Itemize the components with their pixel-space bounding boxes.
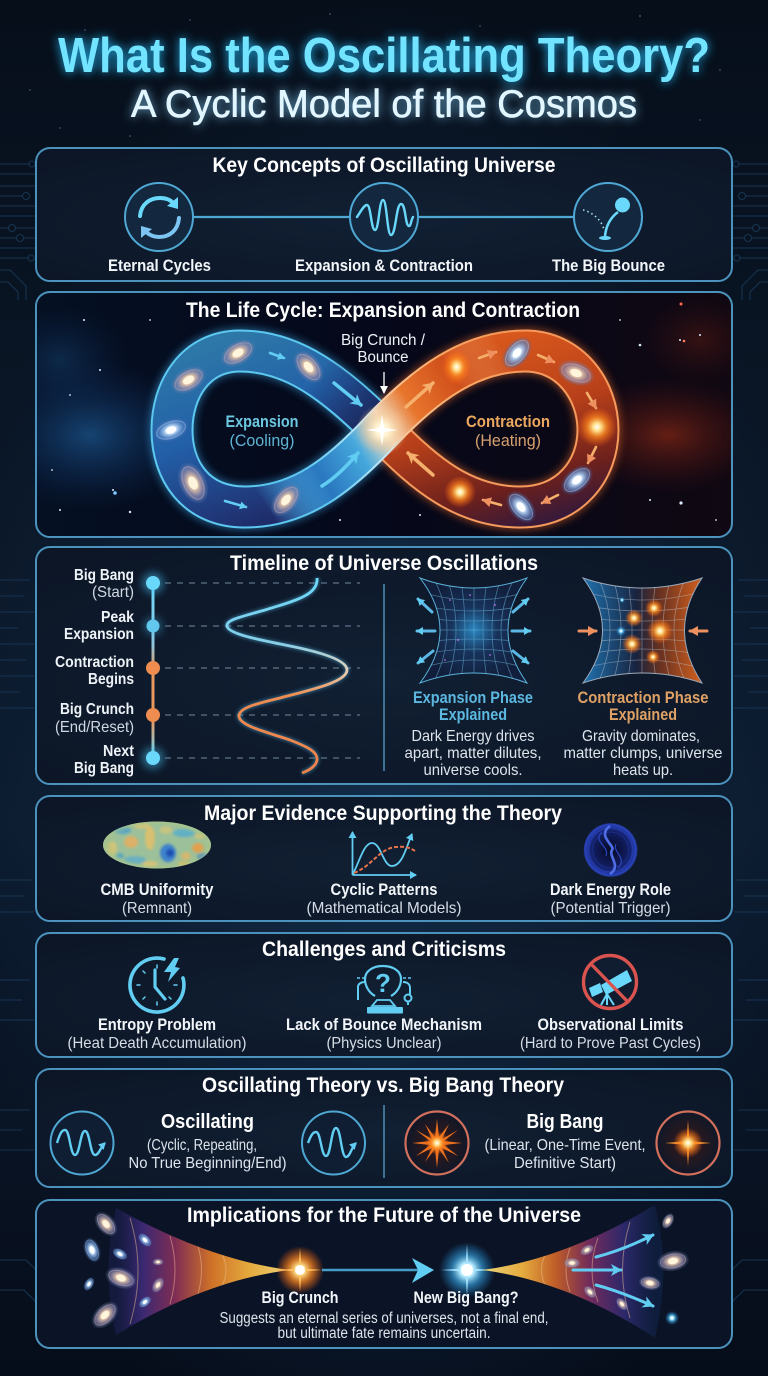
timeline labels: Next: [103, 743, 135, 760]
graphic: contraction space grid: [578, 575, 707, 685]
arrow: bounce pointer: [383, 372, 385, 393]
label: expansion cooling: [226, 412, 298, 450]
timeline labels: Big Crunch: [60, 701, 134, 718]
graphic: expansion space grid: [415, 575, 532, 685]
heading: implications: Implications for the Future of the Universe: [187, 1203, 581, 1227]
label: CMB uniformity: (Remnant): [122, 900, 192, 917]
icon: eternal cycles: [125, 183, 193, 251]
text: expansion phase explained: [404, 689, 542, 779]
label: dark energy role: (Potential Trigger): [550, 900, 670, 917]
text: big bang: Definitive Start): [514, 1155, 616, 1172]
panel: implications: [36, 1200, 732, 1348]
text: contraction phase explained: Contraction Phase: [578, 689, 708, 707]
left loop band: [172, 351, 382, 507]
label: contraction heating: [466, 412, 550, 450]
heading: timeline: Timeline of Universe Oscillations: [230, 551, 538, 575]
icon: expansion and contraction wave: [350, 183, 418, 251]
label: lack of bounce mechanism: Lack of Bounce Mechanism: [286, 1016, 482, 1034]
left funnel: [80, 1207, 290, 1335]
label: entropy problem: (Heat Death Accumulation): [68, 1035, 246, 1052]
icon: CMB map: [103, 822, 211, 868]
icon: cyclic patterns chart: [352, 832, 416, 875]
text: expansion phase explained: Dark Energy drives: [412, 728, 534, 745]
heading: evidence: Major Evidence Supporting the Theory: [204, 801, 562, 825]
text: contraction phase explained: Explained: [609, 706, 677, 724]
subtitle: A Cyclic Model of the Cosmos: [131, 83, 637, 126]
text: oscillating: Oscillating: [161, 1111, 254, 1133]
icon: oscillating wave 1: [50, 1112, 114, 1174]
oscillation wave: [227, 578, 347, 773]
text: contraction phase explained: matter clumps, universe: [564, 745, 723, 762]
label: CMB uniformity: CMB Uniformity: [100, 881, 214, 899]
right loop band: [382, 351, 598, 507]
label: lack of bounce mechanism: [286, 1016, 482, 1052]
text: contraction phase explained: heats up.: [613, 762, 673, 779]
label: entropy problem: Entropy Problem: [98, 1016, 216, 1034]
arrows: contraction flow: [406, 352, 596, 505]
text: expansion phase explained: Explained: [439, 706, 507, 724]
subtitle: A Cyclic Model of the Cosmos: [131, 83, 637, 126]
arrows: expansion outward: [417, 599, 530, 663]
icon: bounce mechanism: ?: [375, 968, 391, 998]
label: dark energy role: [550, 881, 671, 917]
timeline labels: Begins: [88, 671, 134, 688]
galaxies: contraction side: [442, 331, 617, 529]
infinity loop: [149, 331, 617, 529]
timeline labels: Contraction: [55, 654, 134, 671]
text: contraction phase explained: Gravity dominates,: [582, 728, 700, 745]
panel: comparison: [36, 1069, 732, 1187]
text: contraction phase explained: [564, 689, 723, 779]
text: implications summary: [220, 1310, 548, 1342]
label: contraction heating: Contraction: [466, 412, 550, 431]
heading: life cycle: The Life Cycle: Expansion and Contraction: [186, 298, 580, 322]
arrows: outward expansion: [573, 1235, 653, 1306]
label: cyclic patterns: (Mathematical Models): [306, 900, 462, 917]
text: big bang: Big Bang: [526, 1111, 604, 1133]
text: big bang: [484, 1111, 646, 1172]
panel: timeline: [36, 547, 732, 784]
arrows: expansion flow: [225, 353, 361, 507]
galaxies: expansion side: [149, 333, 330, 522]
label: cyclic patterns: Cyclic Patterns: [330, 881, 438, 899]
icon: big bang burst 2: [656, 1112, 720, 1174]
timeline labels: Peak: [101, 609, 134, 626]
bounce star: [356, 404, 408, 456]
timeline labels: [55, 567, 135, 777]
icon: big bounce: [574, 183, 642, 251]
label: expansion cooling: (Cooling): [230, 431, 294, 450]
text: oscillating: [128, 1111, 286, 1172]
heading: key concepts: Key Concepts of Oscillating Universe: [212, 153, 556, 177]
text: implications summary: Suggests an eternal series of universes, not a final end,: [220, 1310, 548, 1327]
timeline labels: Big Bang: [74, 760, 134, 777]
label: expansion and contraction: Expansion & Contraction: [295, 257, 473, 275]
timeline labels: (End/Reset): [55, 719, 134, 736]
label: lack of bounce mechanism: (Physics Unclear): [326, 1035, 442, 1052]
text: oscillating: No True Beginning/End): [128, 1155, 286, 1172]
label: cyclic patterns: [306, 881, 462, 917]
label: observational limits: [520, 1016, 701, 1052]
label: dark energy role: Dark Energy Role: [550, 881, 671, 899]
label: contraction heating: (Heating): [475, 431, 541, 450]
icon: dark energy swirl: [584, 823, 638, 877]
right funnel: [482, 1205, 691, 1338]
divider: [383, 1105, 385, 1178]
icon: bounce mechanism: [357, 966, 412, 1014]
connector line: [193, 216, 574, 218]
panel: challenges: [36, 933, 732, 1057]
timeline labels: Expansion: [64, 626, 134, 643]
heading: challenges: Challenges and Criticisms: [262, 937, 506, 961]
text: expansion phase explained: Expansion Phase: [413, 689, 533, 707]
text: expansion phase explained: apart, matter dilutes,: [404, 745, 542, 762]
label: expansion cooling: Expansion: [226, 412, 298, 431]
label: big bounce: The Big Bounce: [552, 257, 665, 275]
label: eternal cycles: Eternal Cycles: [108, 257, 211, 275]
timeline dashed guides: [165, 583, 360, 758]
text: expansion phase explained: universe cools.: [424, 762, 522, 779]
icon: oscillating wave 2: [302, 1112, 365, 1174]
timeline nodes: [142, 572, 164, 769]
panel: evidence: [36, 796, 732, 921]
label: big crunch bounce: Big Crunch /: [341, 332, 426, 349]
label: big crunch bounce: [341, 332, 426, 366]
icon: entropy clock: [130, 958, 184, 1012]
text: oscillating: (Cyclic, Repeating,: [147, 1137, 257, 1154]
loop crossing: [245, 351, 525, 507]
text: big bang: (Linear, One-Time Event,: [484, 1137, 646, 1154]
label: big crunch bounce: Bounce: [358, 349, 408, 366]
star: big crunch: [276, 1246, 324, 1294]
arrows: contraction inward: [579, 630, 707, 632]
label: big crunch: Big Crunch: [262, 1289, 338, 1307]
timeline axis: [142, 572, 164, 769]
icon: big bang burst 1: [406, 1112, 468, 1174]
timeline labels: Big Bang: [74, 567, 134, 584]
text: implications summary: but ultimate fate remains uncertain.: [278, 1325, 490, 1342]
label: CMB uniformity: [100, 881, 214, 917]
nebula background: [0, 295, 768, 521]
timeline labels: (Start): [92, 584, 134, 601]
panel: key concepts: [36, 148, 732, 281]
panel: life cycle: [0, 292, 768, 537]
icon: observational limits: [584, 956, 636, 1008]
arrow: crunch to new bang: [322, 1258, 434, 1283]
label: new big bang: New Big Bang?: [414, 1289, 518, 1307]
heading: comparison: Oscillating Theory vs. Big Bang Theory: [202, 1073, 564, 1097]
star: new big bang: [439, 1242, 495, 1298]
label: observational limits: (Hard to Prove Past Cycles): [520, 1035, 701, 1052]
label: entropy problem: [68, 1016, 246, 1052]
divider: [383, 584, 385, 771]
label: observational limits: Observational Limits: [538, 1016, 684, 1034]
